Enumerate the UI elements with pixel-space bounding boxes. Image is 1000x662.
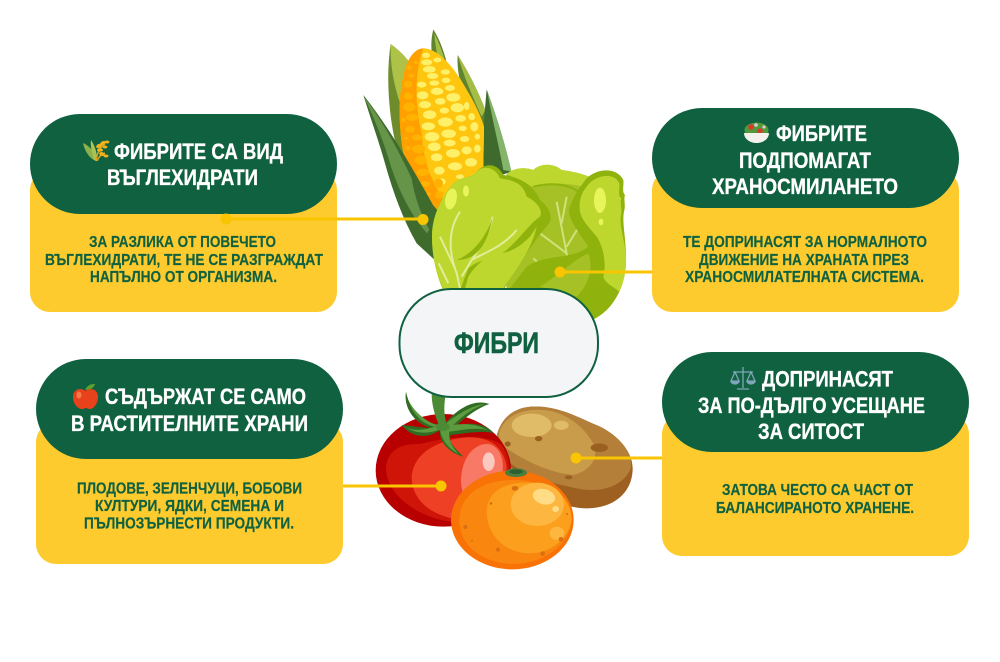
panel: digestion [652, 108, 959, 312]
orange [451, 468, 574, 569]
heading pill: satiety [662, 352, 969, 452]
body text [45, 234, 323, 286]
illustration: tomato, potato and orange [376, 392, 633, 569]
panel: carbohydrates [30, 114, 337, 312]
body text: ДВИЖЕНИЕ НА ХРАНАТА ПРЕЗ [699, 252, 909, 269]
connector: plant foods to tomato [343, 480, 446, 492]
body text [716, 482, 914, 517]
tomato [376, 392, 511, 527]
body text: КУЛТУРИ, ЯДКИ, СЕМЕНА И [95, 498, 284, 515]
icon: salad bowl [744, 122, 769, 143]
heading text: ФИБРИТЕ СА ВИД [114, 139, 283, 164]
heading text: ХРАНОСМИЛАНЕТО [712, 174, 898, 199]
body text: НАПЪЛНО ОТ ОРГАНИЗМА. [90, 269, 277, 286]
lettuce [432, 165, 626, 319]
body text: ЗАТОВА ЧЕСТО СА ЧАСТ ОТ [722, 482, 913, 499]
connector: digestion to lettuce [554, 266, 652, 278]
central title pill: ФИБРИ [454, 327, 539, 360]
body text: ТЕ ДОПРИНАСЯТ ЗА НОРМАЛНОТО [683, 234, 927, 251]
central title pill [400, 289, 598, 397]
body text: ЗА РАЗЛИКА ОТ ПОВЕЧЕТО [89, 234, 276, 251]
icon: apple [73, 384, 98, 409]
panel: plant foods [36, 359, 343, 564]
body text: ВЪГЛЕХИДРАТИ, ТЕ НЕ СЕ РАЗГРАЖДАТ [45, 252, 323, 269]
body text [683, 234, 927, 286]
heading text [71, 384, 308, 436]
potato [497, 406, 633, 508]
body text: БАЛАНСИРАНОТО ХРАНЕНЕ. [716, 500, 914, 517]
body text [77, 480, 302, 532]
icon: balance scales [731, 367, 755, 389]
heading pill: plant foods [36, 359, 343, 459]
icon: wheat [83, 140, 110, 161]
panel: satiety [662, 352, 969, 556]
tomato calyx [402, 392, 493, 457]
corn [363, 29, 511, 263]
connector: carbohydrates to corn [220, 214, 428, 225]
heading text: ВЪГЛЕХИДРАТИ [107, 165, 258, 190]
body text: ПЪЛНОЗЪРНЕСТИ ПРОДУКТИ. [84, 516, 294, 532]
heading text [698, 366, 925, 444]
heading text: ПОДПОМАГАТ [739, 148, 871, 173]
body text: ПЛОДОВЕ, ЗЕЛЕНЧУЦИ, БОБОВИ [77, 480, 302, 498]
heading text: ЗА ПО-ДЪЛГО УСЕЩАНЕ [698, 393, 925, 418]
heading text: СЪДЪРЖАТ СЕ САМО [105, 384, 306, 409]
connector: satiety to potato [570, 452, 662, 464]
illustration: corn and lettuce [363, 29, 626, 319]
heading text: ЗА СИТОСТ [758, 419, 864, 444]
heading text: В РАСТИТЕЛНИТЕ ХРАНИ [71, 411, 308, 436]
heading text: ФИБРИТЕ [776, 121, 867, 146]
heading text [712, 121, 898, 199]
heading text [107, 139, 283, 190]
heading pill: digestion [652, 108, 959, 208]
heading text: ДОПРИНАСЯТ [762, 366, 893, 392]
body text: ХРАНОСМИЛАТЕЛНАТА СИСТЕМА. [685, 269, 924, 286]
heading pill: carbohydrates [30, 114, 337, 214]
